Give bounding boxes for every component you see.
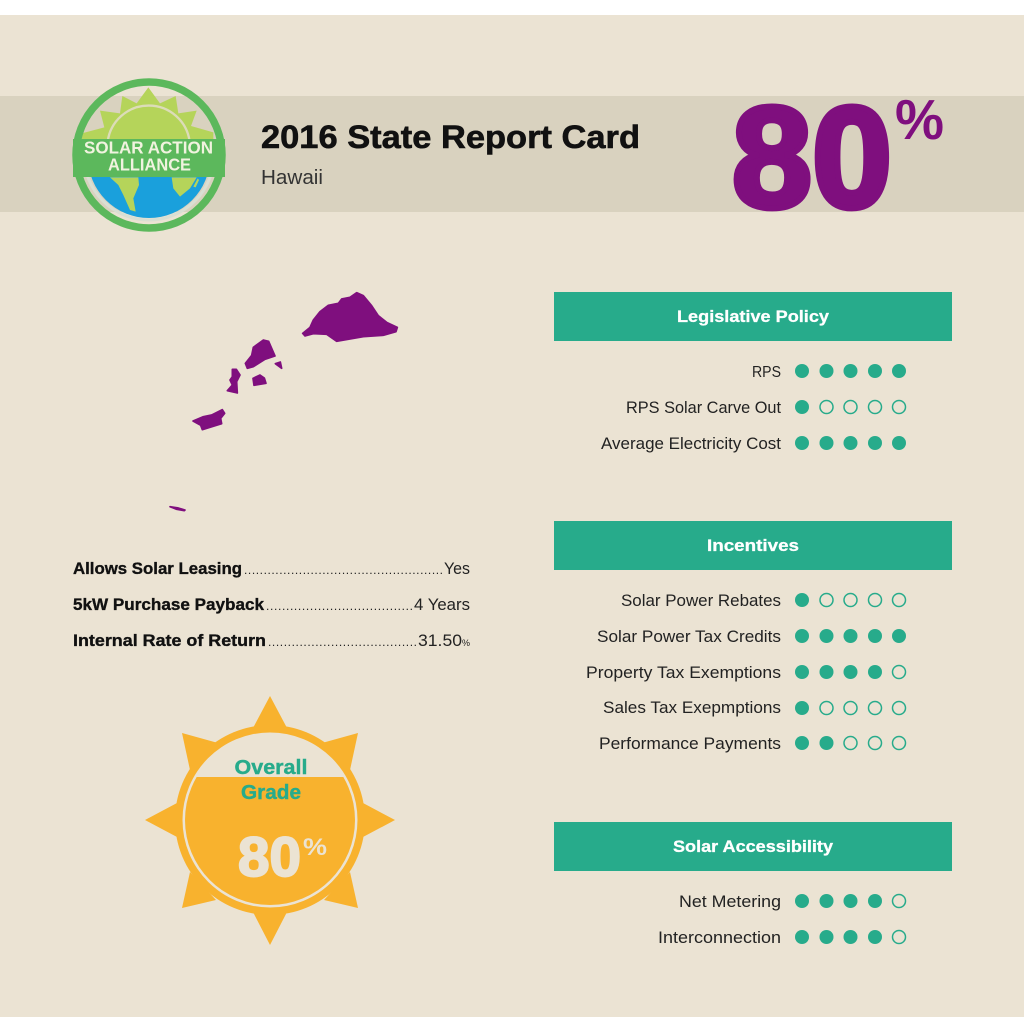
- header band: [0, 96, 1024, 212]
- heading bar: [554, 521, 952, 570]
- grade value: [238, 825, 327, 888]
- overall grade sun badge: [145, 696, 395, 945]
- fact: internal rate of return: %: [462, 638, 470, 648]
- fact: internal rate of return: ......................................: [268, 635, 417, 649]
- heading bar: [554, 822, 952, 871]
- fact: solar leasing: [73, 559, 470, 578]
- fact: internal rate of return: [73, 631, 470, 650]
- fact: internal rate of return: 31.50: [418, 631, 462, 650]
- fact: solar leasing: ...................................................: [244, 563, 443, 577]
- row: performance payments: Performance Payments: [599, 734, 781, 753]
- grade value: %: [303, 834, 327, 861]
- fact: purchase payback: 5kW Purchase Payback: [73, 595, 265, 614]
- row: solar power rebates: [621, 591, 906, 610]
- panel: legislative policy: [554, 292, 952, 453]
- logo banner: [73, 139, 225, 177]
- state name: Hawaii: [261, 167, 323, 189]
- grade label: Overall: [234, 757, 308, 779]
- logo wordmark: SOLAR ACTION: [84, 138, 213, 158]
- logo: Solar Action Alliance: [73, 82, 225, 228]
- fact: purchase payback: 4 Years: [414, 595, 470, 614]
- logo ring: [76, 82, 222, 228]
- row: sales tax exemptions: Sales Tax Exepmptions: [603, 698, 781, 717]
- grade value: 80: [238, 825, 301, 888]
- row: RPS: [752, 364, 906, 381]
- headline score: 80: [732, 77, 892, 238]
- logo wordmark: ALLIANCE: [108, 154, 191, 174]
- facts list: [73, 559, 470, 650]
- logo earth: [86, 177, 212, 222]
- row: interconnection: [658, 928, 906, 947]
- row: solar power tax credits: Solar Power Tax Credits: [597, 627, 781, 646]
- panel: incentives: [554, 521, 952, 753]
- row: sales tax exemptions: [603, 698, 906, 717]
- heading bar: Solar Accessibility: [673, 837, 834, 856]
- row: property tax exemptions: Property Tax Exemptions: [586, 663, 781, 682]
- row: average electricity cost: Average Electricity Cost: [601, 434, 781, 453]
- title: 2016 State Report Card: [261, 119, 640, 155]
- heading bar: [554, 292, 952, 341]
- row: interconnection: Interconnection: [658, 928, 781, 947]
- row: net metering: Net Metering: [679, 892, 781, 911]
- fact: solar leasing: Allows Solar Leasing: [73, 559, 242, 578]
- fact: internal rate of return: Internal Rate of Return: [73, 631, 266, 650]
- row: solar power tax credits: [597, 627, 906, 646]
- row: net metering: [679, 892, 906, 911]
- logo wordmark: [84, 138, 213, 174]
- grade label: [234, 757, 308, 804]
- row: average electricity cost: [601, 434, 906, 453]
- sun rays: [145, 696, 395, 945]
- fact: solar leasing: Yes: [444, 559, 470, 578]
- grade label: Grade: [241, 782, 301, 804]
- row: solar power rebates: Solar Power Rebates: [621, 591, 781, 610]
- headline score: %: [895, 88, 944, 152]
- row: RPS solar carve out: RPS Solar Carve Out: [626, 398, 781, 417]
- row: RPS solar carve out: [626, 398, 906, 417]
- panel: solar accessibility: [554, 822, 952, 947]
- row: RPS: RPS: [752, 364, 781, 381]
- fact: purchase payback: .....................................: [266, 599, 413, 613]
- map: Hawaii islands: [170, 293, 397, 511]
- heading bar: Incentives: [707, 536, 799, 555]
- row: property tax exemptions: [586, 663, 906, 682]
- heading bar: Legislative Policy: [677, 307, 830, 326]
- row: performance payments: [599, 734, 906, 753]
- fact: purchase payback: [73, 595, 470, 614]
- logo sun: [82, 87, 213, 142]
